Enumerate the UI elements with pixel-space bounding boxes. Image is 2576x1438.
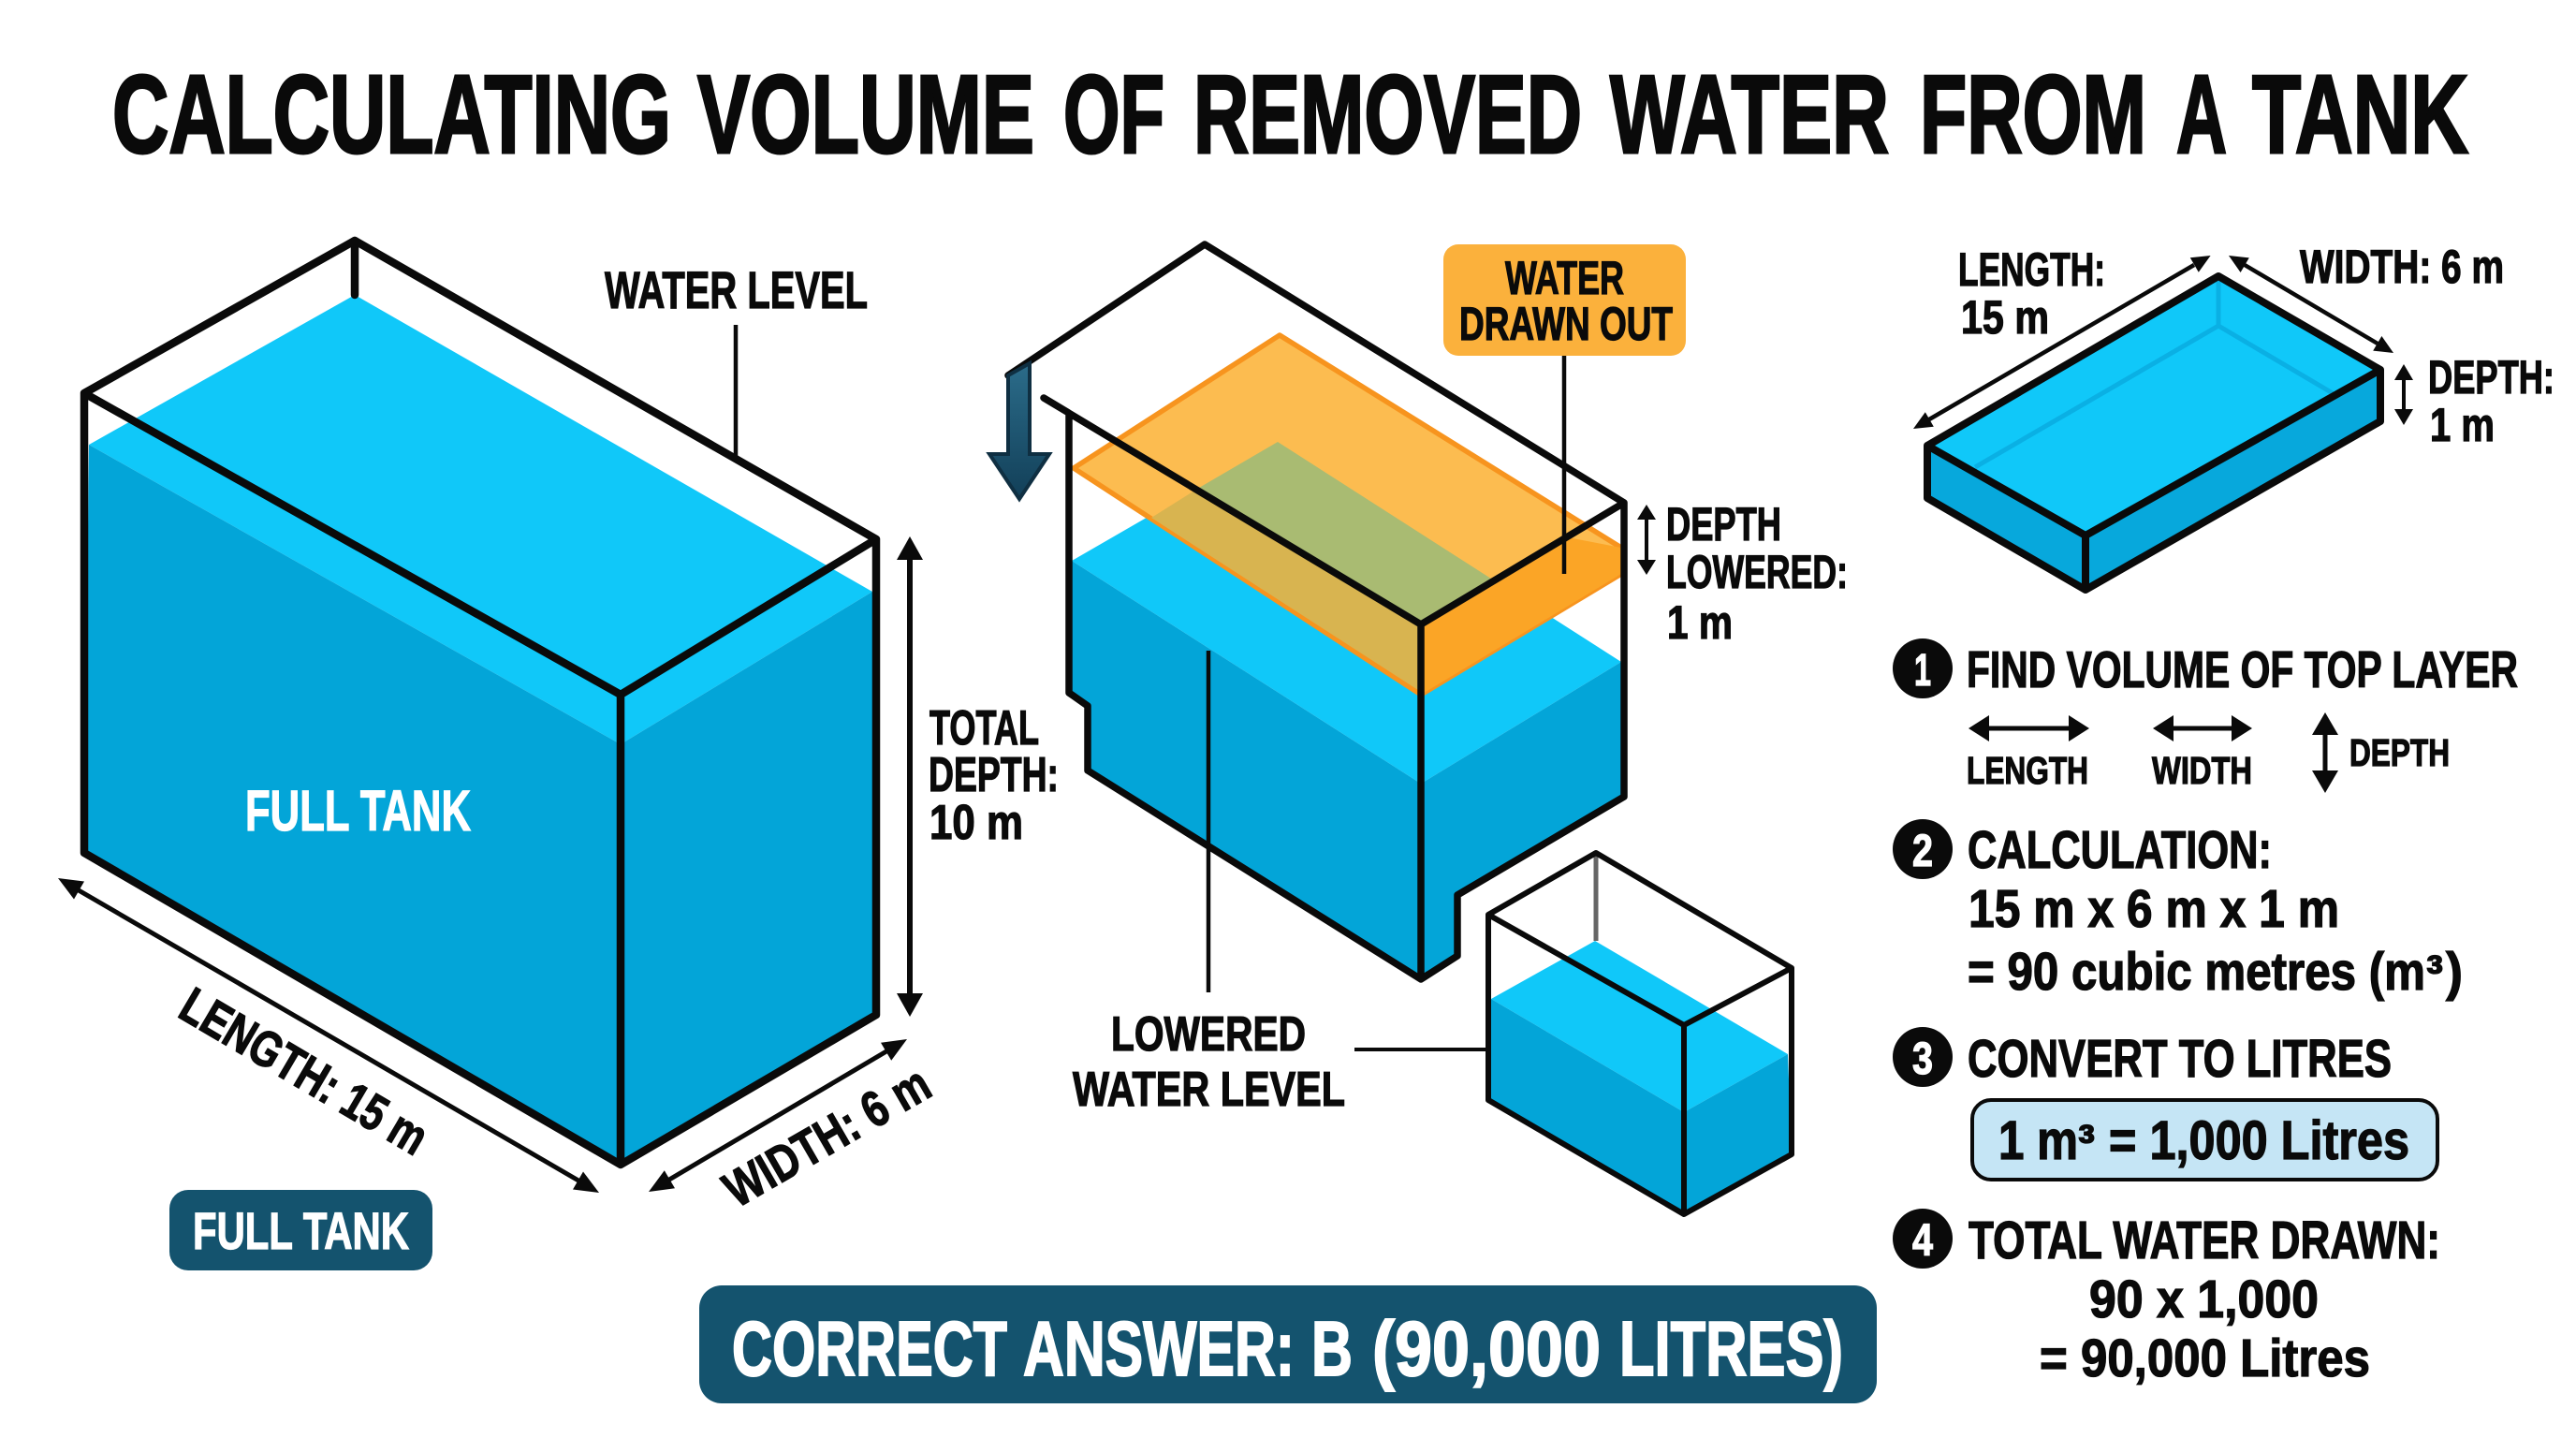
slab outline	[1927, 276, 2380, 590]
water surface	[1072, 442, 1621, 784]
total depth label: DEPTH:	[929, 748, 1059, 802]
number badge 3: 3	[1912, 1034, 1933, 1084]
banner: correct answer: ANSWER:	[1023, 1305, 1295, 1392]
slab side faces	[1927, 370, 2380, 590]
icon: width arrow	[2153, 715, 2252, 741]
lowered water level leader line	[1207, 651, 1210, 992]
conversion box	[1972, 1100, 2437, 1180]
title: CALCULATING	[112, 52, 671, 177]
water top surface	[89, 295, 872, 744]
banner: correct answer: CORRECT	[732, 1305, 1007, 1392]
lowered water level label: LOWERED	[1111, 1007, 1306, 1062]
panel: step 3	[1893, 1027, 2437, 1180]
total depth label: 10 m	[929, 796, 1023, 850]
callout: water drawn out: DRAWN OUT	[1459, 298, 1673, 350]
depth lowered label: LOWERED:	[1666, 546, 1848, 598]
arrow: slab depth	[2394, 364, 2413, 425]
callout: water drawn out	[1443, 244, 1686, 356]
tank outline	[1488, 853, 1792, 1214]
banner: correct answer: LITRES)	[1619, 1305, 1843, 1392]
length label: LENGTH: 15 m	[170, 977, 437, 1167]
step 3 heading: CONVERT TO LITRES	[1968, 1029, 2392, 1089]
banner: correct answer: B	[1311, 1305, 1353, 1392]
panel: step 1	[1893, 638, 2518, 793]
conversion box: ³	[2078, 1115, 2095, 1171]
panel: top layer slab	[1913, 241, 2554, 590]
step 2 heading: CALCULATION:	[1968, 820, 2272, 880]
arrow: slab width	[2229, 256, 2393, 353]
title: TANK	[2252, 52, 2468, 177]
slab length label: 15 m	[1961, 291, 2049, 344]
slab depth label: 1 m	[2430, 399, 2495, 451]
full tank label on water: FULL TANK	[245, 779, 471, 843]
panel: step 4	[1893, 1209, 2440, 1388]
tank outline	[84, 241, 876, 1165]
total line: = 90,000 Litres	[2040, 1328, 2370, 1388]
water level leader line	[734, 325, 738, 459]
water level label: WATER LEVEL	[605, 260, 868, 319]
slab width label: WIDTH: 6 m	[2300, 241, 2504, 293]
leader to small tank	[1354, 1048, 1486, 1051]
number badge 4	[1893, 1209, 1953, 1269]
conversion box: = 1,000 Litres	[2109, 1110, 2409, 1171]
width label: WIDTH: 6 m	[714, 1055, 940, 1218]
title: A	[2176, 52, 2227, 177]
banner: correct answer	[699, 1285, 1877, 1403]
total depth label: TOTAL	[929, 701, 1039, 756]
panel: lowered tank	[989, 244, 1848, 1117]
water faces	[1488, 999, 1792, 1214]
water faces	[1069, 561, 1624, 979]
number badge 3	[1893, 1027, 1953, 1087]
badge: full tank: FULL TANK	[193, 1201, 409, 1260]
depth lowered label	[1666, 498, 1848, 649]
removed layer: orange slab	[1074, 335, 1621, 695]
number badge 1	[1893, 638, 1953, 698]
title: WATER	[1610, 52, 1889, 177]
panel: step 2	[1893, 819, 2463, 1002]
title: OF	[1063, 52, 1164, 177]
title: REMOVED	[1193, 52, 1582, 177]
slab length label: LENGTH:	[1958, 243, 2105, 296]
water surface	[1491, 941, 1788, 1112]
slab length label	[1958, 243, 2105, 344]
arrow: slab length	[1913, 256, 2211, 429]
result line: ³	[2426, 946, 2443, 1002]
icon: depth arrow	[2312, 712, 2338, 793]
arrow: water going down	[989, 363, 1049, 499]
arrow: length	[58, 878, 599, 1193]
number badge 2	[1893, 819, 1953, 879]
arrow: depth lowered	[1637, 505, 1656, 575]
panel: small lowered tank	[1488, 853, 1792, 1214]
banner: correct answer: (90,000	[1372, 1305, 1601, 1392]
depth lowered label: DEPTH	[1666, 498, 1781, 550]
slab top water	[1927, 276, 2380, 536]
width caption: WIDTH	[2152, 749, 2252, 792]
calculation line: 15 m x 6 m x 1 m	[1969, 879, 2339, 939]
conversion box: 1 m	[1998, 1110, 2078, 1171]
icon: length arrow	[1969, 715, 2089, 741]
title: FROM	[1920, 52, 2146, 177]
callout leader line	[1562, 356, 1566, 574]
total depth label	[929, 701, 1059, 850]
arrow: width	[649, 1039, 907, 1192]
step 4 heading: TOTAL WATER DRAWN:	[1969, 1211, 2440, 1270]
length caption: LENGTH	[1967, 749, 2088, 792]
back edge	[1593, 853, 1599, 941]
title	[112, 52, 2468, 177]
badge: full tank	[169, 1190, 432, 1270]
number badge 4: 4	[1912, 1216, 1933, 1266]
arrow: total depth	[897, 536, 923, 1017]
slab depth label	[2428, 351, 2554, 451]
callout: water drawn out: WATER	[1505, 252, 1624, 304]
result line: = 90 cubic metres (m	[1968, 942, 2425, 1002]
result line: )	[2446, 942, 2463, 1002]
tank outline	[1008, 244, 1624, 979]
depth caption: DEPTH	[2349, 731, 2450, 774]
number badge 2: 2	[1912, 827, 1933, 876]
lowered water level label: WATER LEVEL	[1073, 1063, 1345, 1117]
multiplication line: 90 x 1,000	[2089, 1269, 2319, 1329]
depth lowered label: 1 m	[1667, 596, 1733, 649]
number badge 1: 1	[1914, 646, 1931, 696]
lowered water level label	[1073, 1007, 1345, 1117]
panel: full tank	[58, 241, 1059, 1270]
title: VOLUME	[697, 52, 1034, 177]
inner water edges	[1975, 281, 2333, 467]
water front faces	[84, 445, 872, 1165]
